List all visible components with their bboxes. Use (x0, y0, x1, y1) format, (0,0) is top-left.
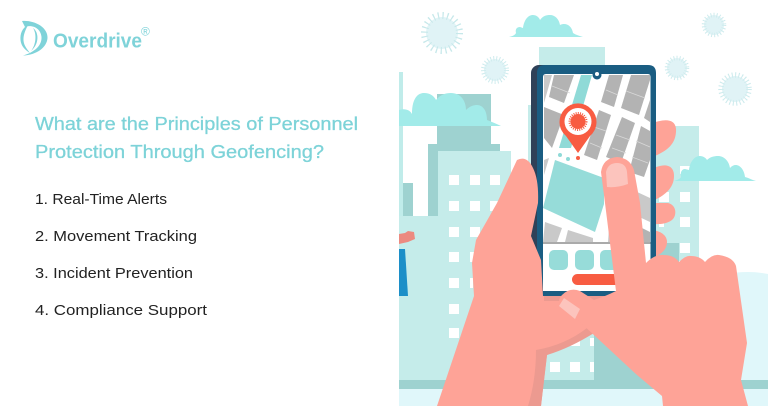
pin dots (576, 156, 580, 160)
registered mark: ® (141, 24, 150, 38)
map river (559, 75, 592, 148)
pin (560, 103, 596, 153)
map (543, 75, 650, 242)
map teal plaza (543, 160, 604, 232)
cloud left (399, 93, 501, 126)
phone screen (543, 74, 650, 291)
icon: logo swirl (20, 21, 48, 56)
map blocks (544, 75, 650, 177)
item 1: 1. Real-Time Alerts (35, 191, 167, 208)
illustration: phone (531, 65, 676, 297)
back buildings (539, 47, 605, 77)
ground (399, 389, 768, 406)
dark block under hand (594, 330, 654, 380)
block dividers (552, 86, 650, 163)
main left building (438, 151, 511, 221)
cloud right (674, 156, 756, 181)
index fingernail (606, 163, 628, 187)
logo (20, 21, 150, 56)
title: What are the Principles of Personnel (35, 113, 358, 134)
hand shadow (528, 328, 594, 406)
sunbursts (424, 15, 749, 103)
illustration: city background (399, 15, 768, 406)
right pale hill (700, 272, 768, 380)
fingers behind phone (650, 120, 676, 258)
right building (655, 126, 699, 261)
camera notch (592, 70, 602, 80)
clouds (399, 15, 756, 181)
logo wordmark: Overdrive (53, 30, 142, 52)
list of principles (35, 191, 208, 319)
title (35, 113, 358, 162)
item 2: 2. Movement Tracking (35, 228, 197, 245)
item 4: 4. Compliance Support (35, 302, 208, 319)
illustration: hands (437, 157, 748, 406)
title: Protection Through Geofencing? (35, 141, 324, 162)
left hand (437, 159, 600, 406)
ground strip (399, 380, 768, 389)
windows (449, 166, 690, 372)
phone shadow on hand (544, 296, 616, 301)
app panel (543, 242, 650, 291)
red shrub (399, 231, 415, 244)
cloud top (509, 15, 583, 37)
right hand (559, 157, 748, 406)
blue sign (399, 249, 408, 296)
phone body (537, 65, 656, 296)
light map blocks (543, 75, 650, 242)
thumbnail (559, 298, 580, 319)
phone back edge (531, 65, 571, 297)
item 3: 3. Incident Prevention (35, 265, 193, 282)
